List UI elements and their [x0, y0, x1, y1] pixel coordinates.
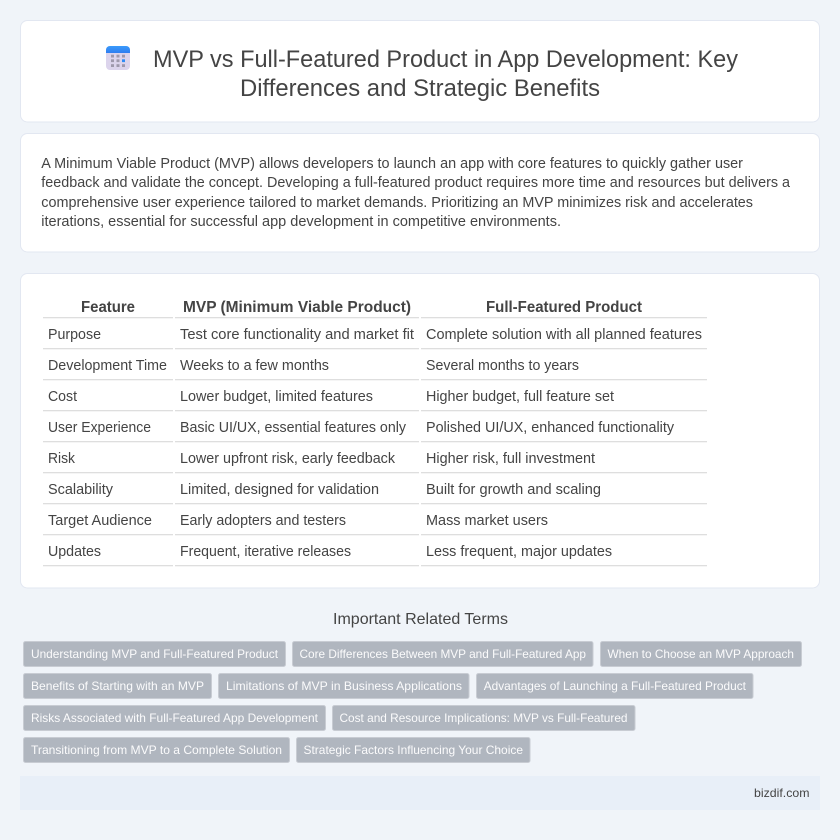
tag: [292, 642, 593, 666]
row: Target Audience: Early adopters and testers: [180, 513, 346, 529]
tag: [24, 738, 290, 762]
row: Development Time: Weeks to a few months: [180, 358, 329, 374]
title: Differences and Strategic Benefits: [240, 75, 600, 102]
row: Cost: [43, 389, 707, 411]
row: Risk: Risk: [48, 451, 76, 467]
icon: calendar: [106, 46, 130, 70]
text block: intro: [41, 156, 790, 230]
tag: Advantages of Launching a Full-Featured Product: [484, 679, 747, 693]
tag: [332, 706, 635, 730]
text block: intro: feedback and validate the concept. Developing a full-featured product requires more time and resources but delivers a: [41, 175, 790, 191]
tag: [218, 674, 469, 698]
row: Purpose: Test core functionality and market fit: [180, 327, 414, 343]
row: Risk: Higher risk, full investment: [426, 451, 595, 467]
row: Updates: Less frequent, major updates: [426, 544, 612, 560]
tag: Limitations of MVP in Business Applications: [226, 679, 462, 693]
row: Risk: Lower upfront risk, early feedback: [180, 451, 396, 467]
row: Development Time: Development Time: [48, 358, 167, 374]
table header: Feature: [81, 299, 135, 316]
row: Scalability: Limited, designed for validation: [180, 482, 379, 498]
table header: [43, 299, 707, 318]
row: Scalability: Built for growth and scaling: [426, 482, 601, 498]
row: Target Audience: Mass market users: [426, 513, 548, 529]
tag: [600, 642, 802, 666]
row: Purpose: Complete solution with all planned features: [426, 327, 702, 343]
tag: Strategic Factors Influencing Your Choice: [304, 743, 523, 757]
row: Target Audience: Target Audience: [48, 513, 152, 529]
panel: comparison table: [20, 274, 820, 588]
tag: Core Differences Between MVP and Full-Featured App: [300, 647, 586, 661]
row: Cost: Cost: [48, 389, 77, 405]
footer bar: bizdif.com: [754, 786, 810, 800]
tag: Cost and Resource Implications: MVP vs Full-Featured: [340, 711, 628, 725]
tag: Transitioning from MVP to a Complete Solution: [31, 743, 282, 757]
row: Purpose: Purpose: [48, 327, 101, 343]
tag: [24, 706, 326, 730]
table header: MVP (Minimum Viable Product): [183, 299, 411, 316]
text block: intro: comprehensive user experience tailored to market demands. Prioritizing an MVP minimizes risk and accelerates: [41, 195, 753, 211]
row: Updates: Frequent, iterative releases: [180, 544, 351, 560]
panel: related term tags: [24, 642, 802, 762]
tag: Benefits of Starting with an MVP: [31, 679, 204, 693]
row: User Experience: Basic UI/UX, essential features only: [180, 420, 407, 436]
text block: intro: iterations, essential for successful app development in competitive environments.: [41, 214, 561, 230]
row: User Experience: User Experience: [48, 420, 151, 436]
row: Updates: Updates: [48, 544, 101, 560]
title: MVP vs Full-Featured Product in App Development: Key: [153, 46, 738, 73]
row: User Experience: Polished UI/UX, enhanced functionality: [426, 420, 675, 436]
row: Target Audience: [43, 513, 707, 535]
table header: Full-Featured Product: [486, 299, 643, 316]
tag: [476, 674, 753, 698]
text block: intro: A Minimum Viable Product (MVP) allows developers to launch an app with core features to quickly gather user: [41, 156, 743, 172]
panel: title card: [20, 20, 820, 122]
row: Cost: Lower budget, limited features: [180, 389, 373, 405]
tag: Risks Associated with Full-Featured App Development: [31, 711, 319, 725]
tag: When to Choose an MVP Approach: [608, 647, 794, 661]
tag: [24, 642, 286, 666]
tag: Understanding MVP and Full-Featured Product: [31, 647, 279, 661]
row: Development Time: [43, 358, 707, 380]
footer bar: [20, 776, 820, 810]
tag: [296, 738, 530, 762]
row: Purpose: [43, 327, 707, 349]
row: Risk: [43, 451, 707, 473]
row: Cost: Higher budget, full feature set: [426, 389, 614, 405]
panel: intro paragraph: [20, 134, 820, 252]
row: User Experience: [43, 420, 707, 442]
row: Updates: [43, 544, 707, 566]
row: Scalability: Scalability: [48, 482, 114, 498]
row: Scalability: [43, 482, 707, 504]
heading: related terms: Important Related Terms: [333, 611, 508, 628]
title: [153, 46, 738, 102]
tag: [24, 674, 212, 698]
row: Development Time: Several months to years: [426, 358, 579, 374]
